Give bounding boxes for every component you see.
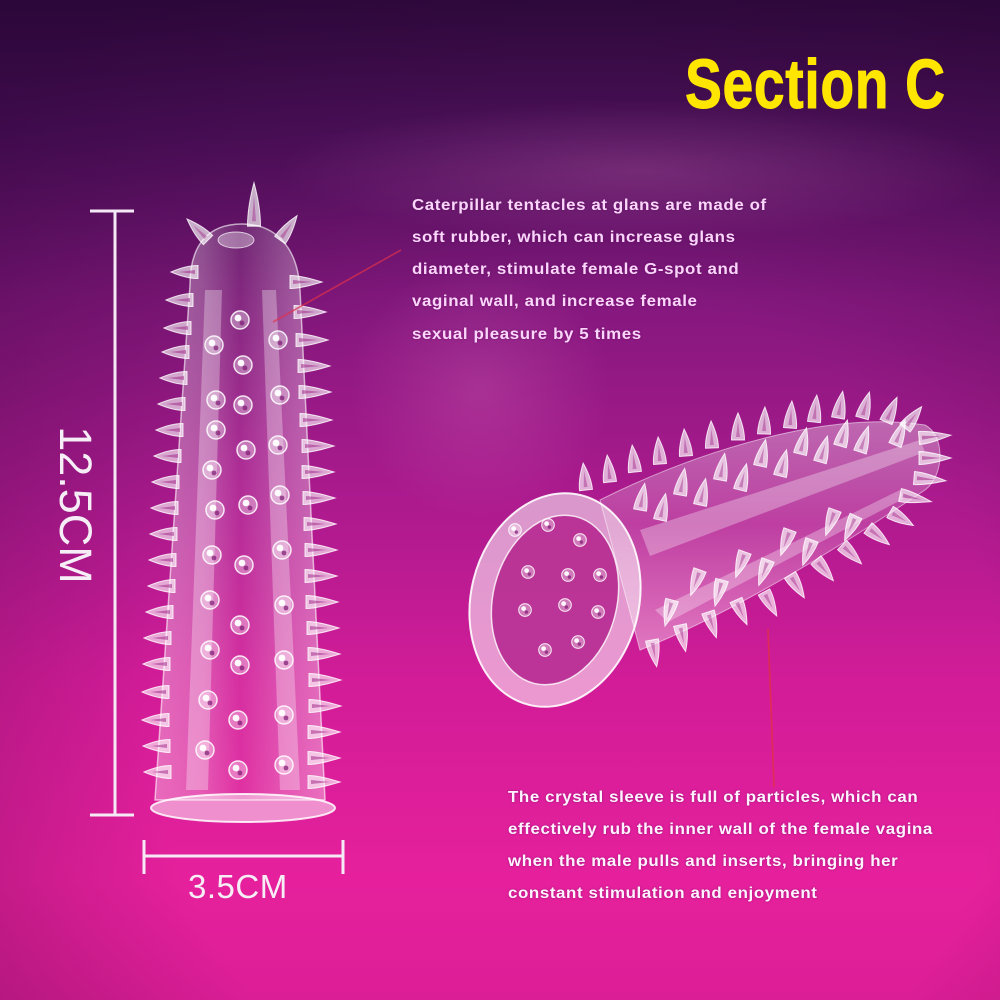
callout line: glans <box>272 249 402 323</box>
text block: caterpillar tentacles: vaginal wall, and increase female <box>412 293 698 310</box>
title: Section C <box>685 45 946 123</box>
callout line: crystal sleeve <box>767 629 775 787</box>
top spikes <box>577 390 927 521</box>
text block: caterpillar tentacles: soft rubber, which can increase glans <box>412 229 736 246</box>
text block: caterpillar tentacles: sexual pleasure by 5 times <box>412 326 642 343</box>
text block: crystal sleeve: when the male pulls and inserts, bringing her <box>508 853 898 870</box>
tip spikes <box>899 429 951 508</box>
text block: crystal sleeve: constant stimulation and enjoyment <box>508 885 818 902</box>
right side spikes <box>290 276 341 788</box>
width dimension line <box>142 840 344 874</box>
text block: crystal sleeve <box>507 789 933 902</box>
text block: crystal sleeve: The crystal sleeve is full of particles, which can <box>508 789 918 806</box>
height dimension line <box>90 210 134 816</box>
text block: caterpillar tentacles <box>412 197 767 343</box>
surface bumps <box>196 311 293 779</box>
product: upright sleeve with dimensions <box>140 181 342 823</box>
height label: 12.5CM <box>50 426 101 584</box>
inner bumps <box>509 519 606 656</box>
sleeve body <box>155 224 325 800</box>
text block: crystal sleeve: effectively rub the inner wall of the female vagina <box>508 821 933 838</box>
tip spikes <box>182 183 302 248</box>
width label: 3.5CM <box>188 868 288 905</box>
ring opening <box>447 475 663 725</box>
base ring <box>151 794 335 822</box>
sleeve body <box>600 422 940 650</box>
product: angled sleeve <box>468 390 952 708</box>
left side spikes <box>142 266 198 778</box>
inner highlight stripes <box>186 290 300 790</box>
body stripes <box>640 440 925 622</box>
text block: caterpillar tentacles: diameter, stimulate female G-spot and <box>412 261 739 278</box>
lower spikes <box>646 506 917 668</box>
text block: caterpillar tentacles: Caterpillar tentacles at glans are made of <box>412 197 767 214</box>
